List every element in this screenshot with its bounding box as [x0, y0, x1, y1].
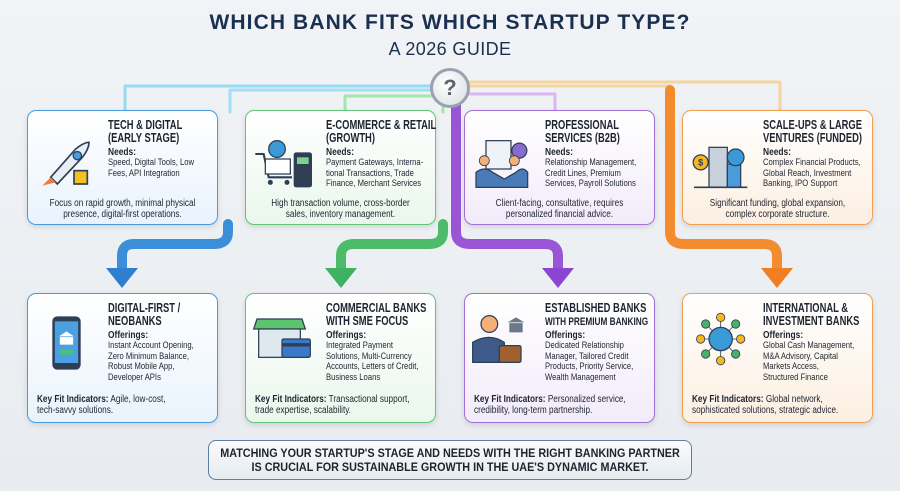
panel: commercial banks [245, 293, 436, 423]
key fit: credibility, long-term partnership. [474, 404, 592, 416]
icon: rocket [42, 142, 90, 186]
needs: Needs: [326, 146, 354, 158]
key fit: tech-savvy solutions. [37, 404, 113, 416]
description: Focus on rapid growth, minimal physical [50, 198, 195, 209]
needs: Relationship Management, [545, 157, 636, 168]
panel: tech & digital [27, 110, 218, 225]
title: WHICH BANK FITS WHICH STARTUP TYPE? [209, 11, 691, 34]
heading: E-COMMERCE & RETAIL [326, 118, 436, 132]
offerings: Developer APIs [108, 372, 161, 383]
description: Significant funding, global expansion, [710, 198, 845, 209]
description [271, 198, 410, 220]
icon: handshake [475, 140, 528, 188]
offerings [763, 329, 854, 383]
needs: tional Transactions, Trade [326, 168, 414, 179]
needs: Needs: [108, 146, 136, 158]
heading [326, 301, 426, 328]
offerings: Offerings: [108, 329, 148, 341]
icon: globe network [696, 312, 746, 366]
offerings: Instant Account Opening, [108, 340, 194, 351]
footer callout [208, 440, 692, 480]
heading: (EARLY STAGE) [108, 130, 179, 144]
panel: scale-ups [682, 110, 873, 225]
heading: DIGITAL-FIRST / [108, 301, 180, 315]
icon: phone bank [52, 316, 81, 370]
key fit: Key Fit Indicators: Global network, [692, 394, 823, 405]
footer callout: MATCHING YOUR STARTUP'S STAGE AND NEEDS WITH THE RIGHT BANKING PARTNER [220, 446, 680, 460]
panel: neobanks [27, 293, 218, 423]
needs: Payment Gateways, Interna- [326, 157, 423, 168]
needs: Fees, API Integration [108, 168, 180, 179]
icon: buildings: $ [698, 158, 703, 168]
offerings: Accounts, Letters of Credit, [326, 361, 419, 372]
needs [108, 146, 194, 179]
key fit: Key Fit Indicators: Transactional support, [255, 394, 410, 405]
heading [108, 118, 182, 144]
description: High transaction volume, cross-border [271, 198, 410, 209]
panel: established banks [464, 293, 655, 423]
description: personalized financial advice. [506, 208, 613, 220]
needs: Speed, Digital Tools, Low [108, 157, 194, 168]
offerings [545, 329, 633, 383]
heading [763, 118, 862, 144]
offerings: Offerings: [326, 329, 366, 341]
heading: TECH & DIGITAL [108, 118, 182, 132]
heading: INVESTMENT BANKS [763, 314, 859, 328]
offerings: Manager, Tailored Credit [545, 351, 628, 362]
offerings: Integrated Payment [326, 340, 393, 351]
icon: buildings [692, 146, 748, 188]
offerings [326, 329, 419, 383]
offerings: Markets Access, [763, 361, 819, 372]
description: Client-facing, consultative, requires [496, 198, 623, 209]
heading: INTERNATIONAL & [763, 301, 848, 315]
key fit: sophisticated solutions, strategic advice. [692, 404, 838, 416]
offerings: Global Cash Management, [763, 340, 854, 351]
description [50, 198, 195, 220]
key fit [474, 394, 626, 416]
offerings: Structured Finance [763, 372, 828, 383]
panel: e-commerce [245, 110, 436, 225]
description [496, 198, 624, 220]
needs: Needs: [545, 146, 573, 158]
heading [763, 301, 859, 328]
offerings: Products, Priority Service, [545, 361, 633, 372]
icon: storefront [252, 318, 311, 358]
heading: SCALE-UPS & LARGE [763, 118, 862, 132]
description [710, 198, 845, 220]
heading [545, 301, 648, 328]
needs [545, 146, 636, 189]
icon: question mark [430, 68, 470, 108]
key fit [37, 394, 166, 416]
description: complex corporate structure. [726, 208, 829, 220]
needs: Finance, Merchant Services [326, 178, 421, 189]
offerings: Robust Mobile App, [108, 361, 175, 372]
offerings: Zero Minimum Balance, [108, 351, 189, 362]
description: presence, digital-first operations. [63, 208, 182, 220]
offerings: Wealth Management [545, 372, 616, 383]
icon: banker [472, 315, 524, 363]
heading [108, 301, 180, 328]
description: sales, inventory management. [286, 208, 395, 220]
needs: Credit Lines, Premium [545, 168, 621, 179]
heading: (GROWTH) [326, 130, 375, 144]
panel: international banks [682, 293, 873, 423]
key fit: Key Fit Indicators: Personalized service, [474, 394, 626, 405]
key fit: Key Fit Indicators: Agile, low-cost, [37, 394, 166, 405]
offerings: M&A Advisory, Capital [763, 351, 838, 362]
needs [326, 146, 423, 189]
footer callout: IS CRUCIAL FOR SUSTAINABLE GROWTH IN THE UAE'S DYNAMIC MARKET. [252, 460, 648, 474]
heading: ESTABLISHED BANKS [545, 301, 646, 315]
heading: PROFESSIONAL [545, 118, 619, 132]
offerings: Dedicated Relationship [545, 340, 624, 351]
heading: COMMERCIAL BANKS [326, 301, 426, 315]
heading: NEOBANKS [108, 314, 162, 328]
offerings: Offerings: [763, 329, 803, 341]
needs [763, 146, 861, 189]
offerings: Business Loans [326, 372, 380, 383]
offerings: Solutions, Multi-Currency [326, 351, 412, 362]
offerings: Offerings: [545, 329, 585, 341]
needs: Complex Financial Products, [763, 157, 861, 168]
needs: Global Reach, Investment [763, 168, 851, 179]
icon: question mark: ? [443, 75, 457, 100]
key fit: trade expertise, scalability. [255, 404, 351, 416]
heading: WITH PREMIUM BANKING [545, 316, 648, 328]
panel: professional services [464, 110, 655, 225]
heading [545, 118, 620, 144]
key fit [692, 394, 838, 416]
needs: Banking, IPO Support [763, 178, 837, 189]
key fit [255, 394, 410, 416]
subtitle: A 2026 GUIDE [389, 39, 511, 59]
heading: VENTURES (FUNDED) [763, 130, 862, 144]
heading: SERVICES (B2B) [545, 130, 620, 144]
needs: Services, Payroll Solutions [545, 178, 636, 189]
offerings [108, 329, 194, 383]
needs: Needs: [763, 146, 791, 158]
heading [326, 118, 436, 144]
icon: cart and terminal [255, 140, 312, 188]
heading: WITH SME FOCUS [326, 314, 408, 328]
